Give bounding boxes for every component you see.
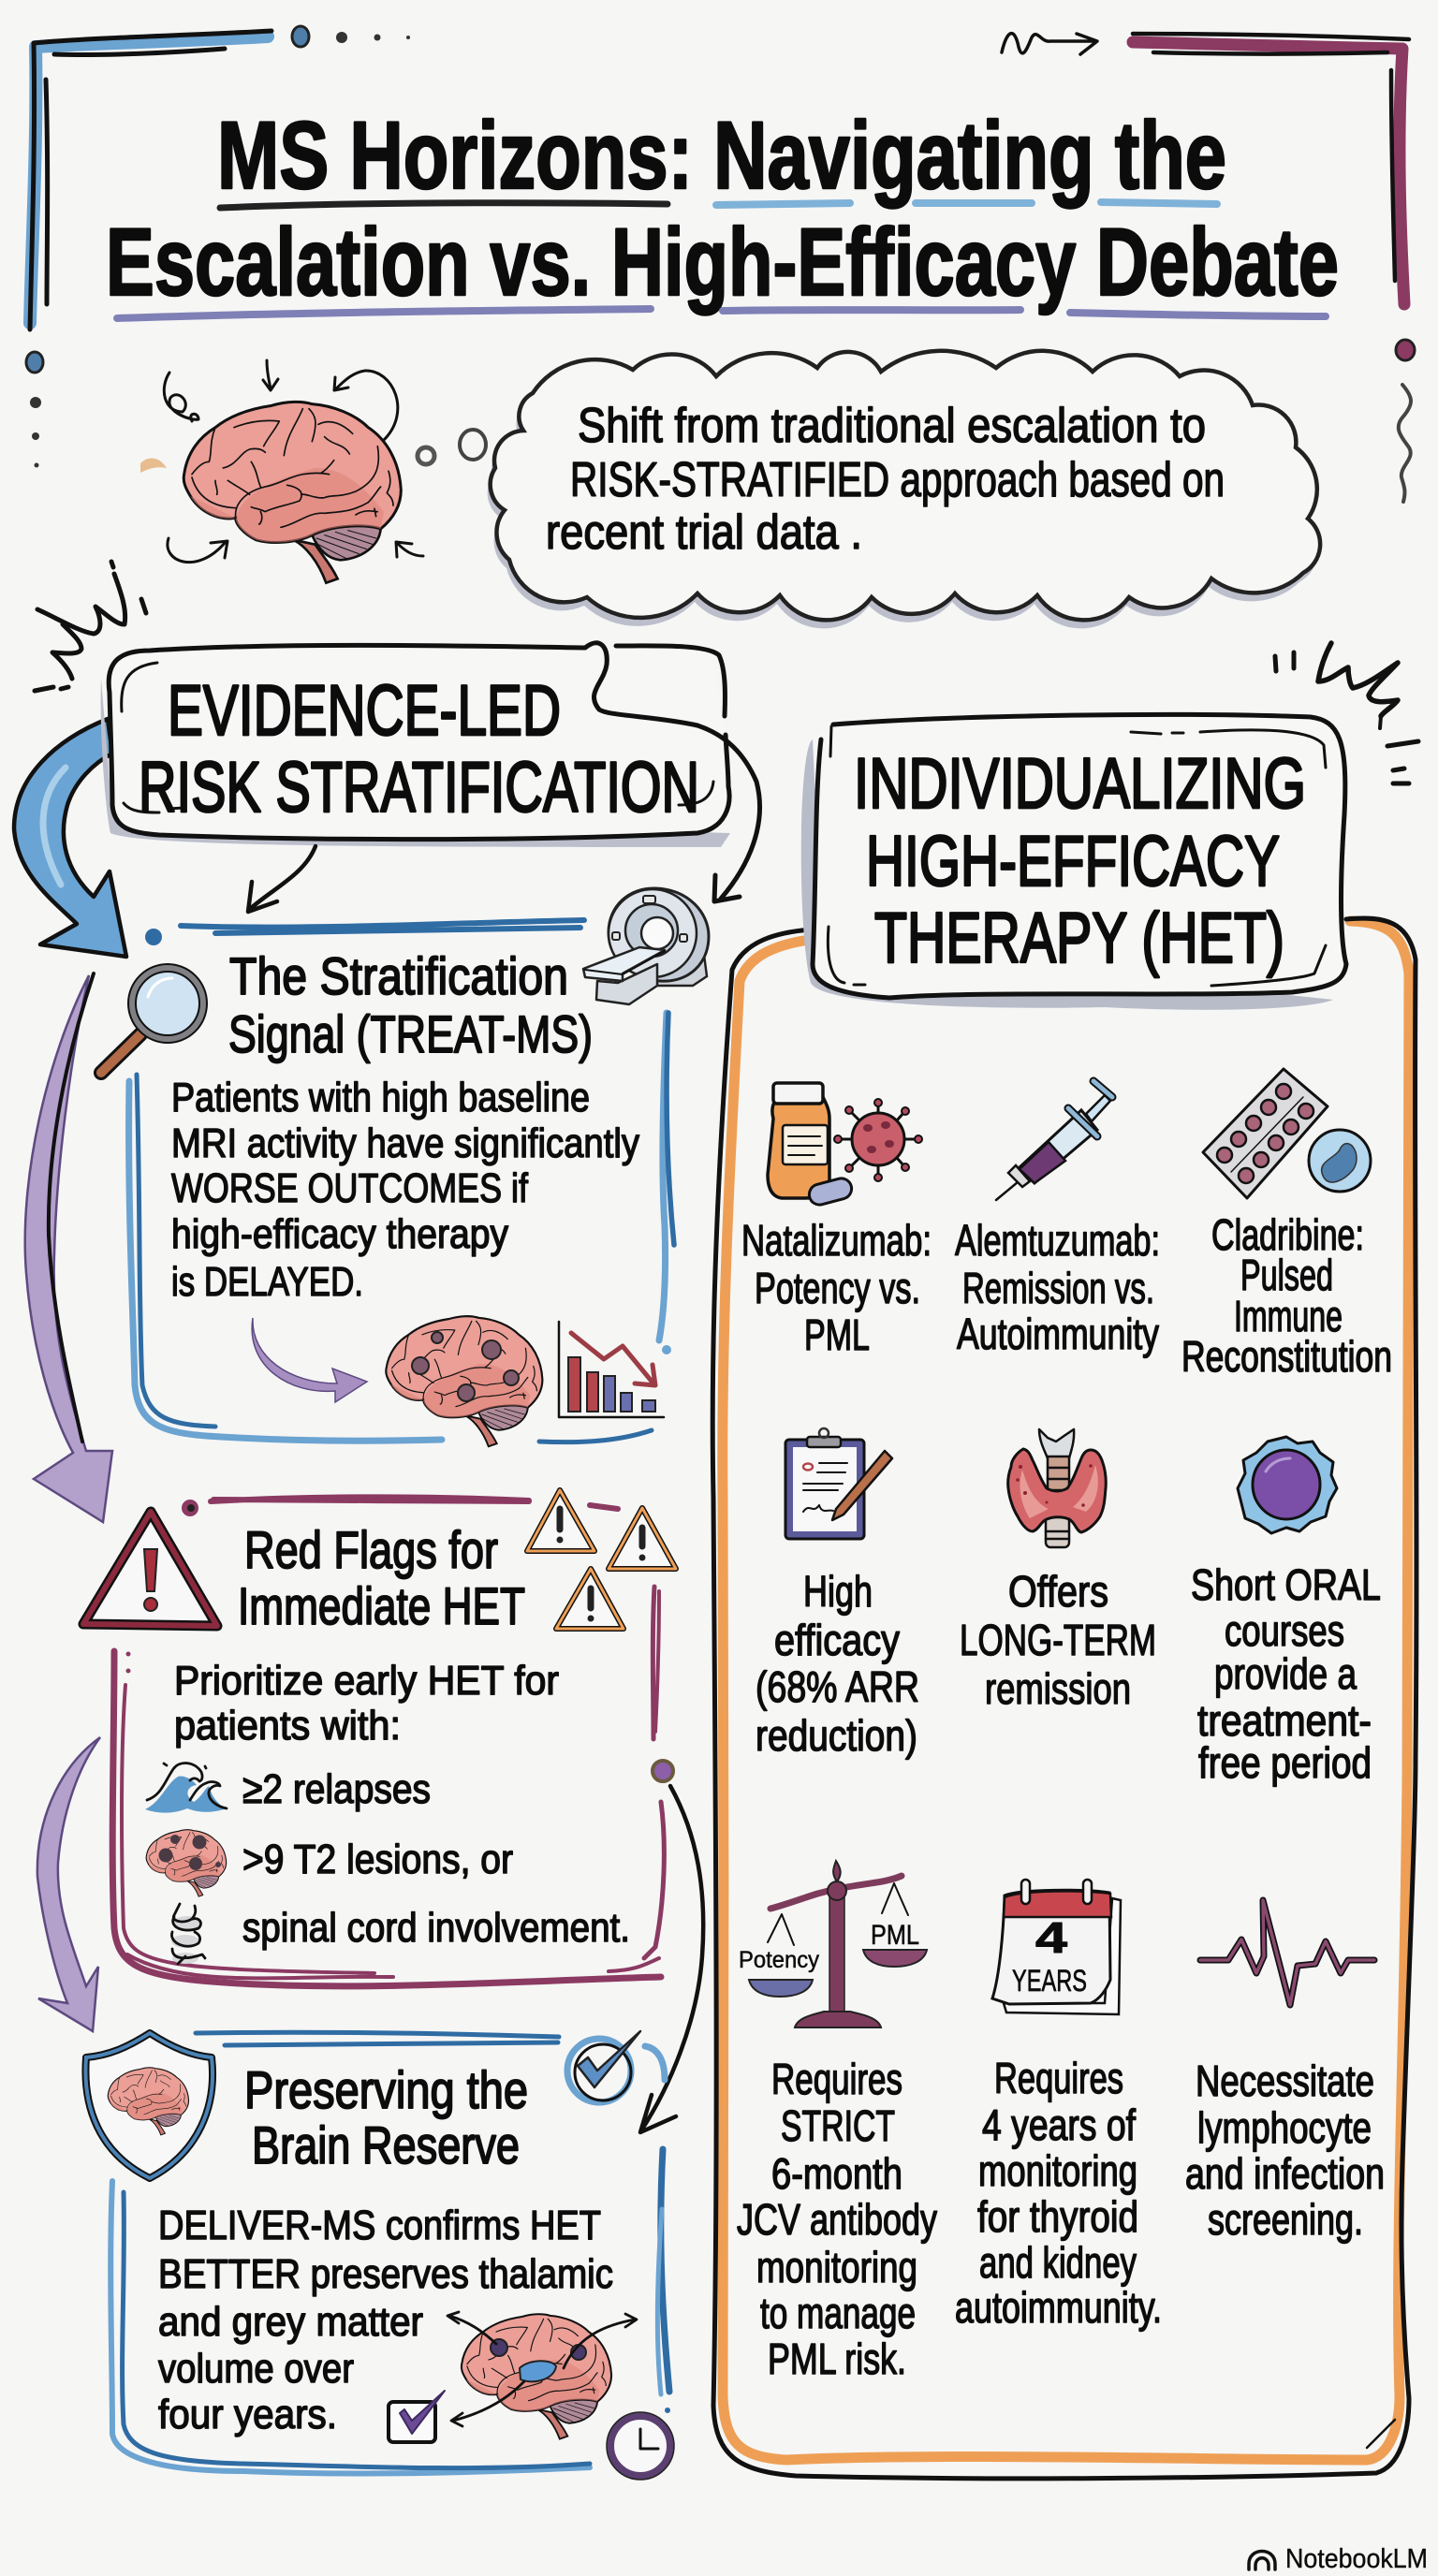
label [756, 1567, 919, 1760]
panel title: Preserving the [244, 2060, 528, 2119]
icon: calendar [992, 1880, 1121, 2014]
scribble left [35, 562, 146, 691]
label [955, 1216, 1160, 1358]
panel: individualizing HET frame [712, 918, 1416, 2479]
icon: syringe [996, 1081, 1112, 1200]
panel title [228, 946, 593, 1063]
column: natalizumab efficacy [756, 1428, 919, 1760]
icon: balance scale: PML [871, 1920, 919, 1951]
label: Natalizumab: [741, 1216, 932, 1265]
label: treatment- [1197, 1696, 1372, 1745]
panel body text: four years. [158, 2392, 337, 2437]
icon: orange warning triangles [527, 1490, 676, 1629]
panel title [244, 2060, 528, 2174]
panel body text: WORSE OUTCOMES if [171, 1165, 529, 1211]
column: cladribine monitoring [1185, 1900, 1385, 2244]
doodle arrows around brain [140, 360, 486, 563]
panel body text: MRI activity have significantly [171, 1120, 639, 1166]
panel body text: BETTER preserves thalamic [158, 2251, 613, 2297]
item: relapses [145, 1764, 431, 1813]
top frame: magenta corner [1133, 34, 1409, 304]
icon: main brain [140, 360, 486, 583]
column: alemtuzumab heading [955, 1081, 1160, 1358]
item: T2 lesions: >9 T2 lesions, or [242, 1837, 513, 1882]
title [106, 102, 1339, 315]
label [737, 2055, 937, 2383]
panel body text: is DELAYED. [171, 1259, 363, 1305]
right dot and squiggle [1396, 340, 1415, 502]
panel body text [174, 1658, 559, 1749]
label: free period [1198, 1738, 1372, 1787]
heading: evidence-led box [101, 643, 760, 901]
panel body text [171, 1075, 639, 1305]
label: provide a [1214, 1649, 1357, 1698]
callout: cloud: RISK-STRATIFIED approach based on [570, 453, 1225, 507]
label [1191, 1560, 1381, 1787]
panel body text: high-efficacy therapy [171, 1211, 508, 1257]
panel body text [158, 2203, 613, 2437]
callout: cloud: recent trial data . [546, 505, 862, 560]
label: Requires [771, 2055, 902, 2103]
panel body text: Prioritize early HET for [174, 1658, 559, 1704]
column: natalizumab heading [741, 1083, 932, 1359]
label: Offers [1008, 1567, 1108, 1616]
label: autoimmunity. [955, 2283, 1162, 2332]
column: alemtuzumab remission [960, 1429, 1156, 1713]
column: natalizumab monitoring [737, 1861, 937, 2383]
callout: cloud [488, 351, 1320, 628]
panel frame [112, 1497, 673, 1986]
heading: individualizing box: INDIVIDUALIZING [854, 744, 1306, 824]
column: cladribine heading [1181, 1069, 1392, 1381]
heading: evidence-led box: EVIDENCE-LED [168, 671, 561, 751]
panel title: Red Flags for [244, 1520, 498, 1579]
small arrow to stratification panel [248, 846, 315, 912]
label: for thyroid [977, 2192, 1138, 2241]
icon: brain with thalamus [448, 2312, 637, 2439]
icon: thyroid [1008, 1429, 1106, 1547]
label: Immune [1234, 1292, 1343, 1340]
column: alemtuzumab monitoring [955, 1880, 1162, 2332]
label: Potency vs. [755, 1264, 920, 1312]
icon: calendar: 4 [1035, 1913, 1068, 1962]
panel body text: volume over [158, 2346, 354, 2392]
callout: cloud: Shift from traditional escalation to [578, 399, 1206, 453]
icon: clipboard [785, 1428, 892, 1539]
big purple arrow 1 [25, 973, 112, 1522]
panel body text: DELIVER-MS confirms HET [158, 2203, 601, 2248]
arrow: red flags to brain reserve [640, 1786, 703, 2132]
panel: stratification signal [101, 888, 709, 1446]
panel title: The Stratification [229, 946, 568, 1005]
label: Requires [994, 2054, 1123, 2102]
title underlines [117, 202, 1326, 318]
label: 6-month [771, 2149, 902, 2198]
label [1181, 1210, 1392, 1381]
icon: pill bottle and virus [768, 1083, 922, 1208]
panel body text: Patients with high baseline [171, 1075, 590, 1120]
icon: check box [389, 2391, 445, 2442]
panel: brain reserve [85, 2031, 674, 2480]
icon: blister pack and cell [1203, 1069, 1371, 1198]
label: monitoring [756, 2243, 917, 2291]
item: T2 lesions [146, 1830, 513, 1896]
label: LONG-TERM [960, 1616, 1156, 1664]
label: PML [804, 1310, 870, 1359]
panel title [238, 1520, 525, 1635]
label: Remission vs. [962, 1264, 1154, 1312]
label: Autoimmunity [957, 1310, 1159, 1358]
label [955, 2054, 1162, 2332]
item: spinal cord: spinal cord involvement. [242, 1905, 630, 1951]
icon: MRI scanner [583, 888, 709, 1004]
heading: evidence-led box: RISK STRATIFICATION [139, 748, 699, 827]
label: to manage [760, 2289, 916, 2337]
label [1185, 2056, 1385, 2244]
label [741, 1216, 932, 1359]
icon: balance scale: Potency [739, 1947, 819, 1973]
label: reduction) [756, 1711, 917, 1760]
icon: lymphocyte [1238, 1437, 1337, 1533]
item: spinal cord [171, 1904, 630, 1964]
panel title: Signal (TREAT-MS) [228, 1004, 593, 1063]
item: relapses: ≥2 relapses [242, 1766, 431, 1812]
label: Necessitate [1196, 2056, 1374, 2105]
heading: individualizing box: HIGH-EFFICACY [866, 822, 1280, 901]
panel title: Brain Reserve [252, 2115, 520, 2174]
label: (68% ARR [756, 1662, 919, 1711]
panel frame [129, 920, 674, 1442]
label: High [803, 1567, 873, 1616]
footer: NotebookLM mark: NotebookLM [1285, 2544, 1428, 2574]
icon: shield with brain [85, 2033, 213, 2178]
label: lymphocyte [1197, 2103, 1372, 2152]
panel: red flags [83, 1490, 676, 1986]
icon: red warning triangle [83, 1512, 217, 1626]
label: screening. [1208, 2195, 1363, 2244]
chart: falling bars [559, 1322, 664, 1417]
panel body text: patients with: [174, 1703, 401, 1749]
thick blue arrow [14, 719, 126, 957]
heading: individualizing box: THERAPY (HET) [874, 899, 1284, 978]
icon: balance scale [739, 1861, 927, 2027]
arrows from brain [448, 2312, 637, 2426]
label: and kidney [979, 2238, 1137, 2287]
label: efficacy [774, 1616, 900, 1664]
label: monitoring [978, 2146, 1137, 2195]
decorative dots top [292, 26, 410, 47]
icon: calendar: YEARS [1012, 1964, 1087, 1998]
label: Short ORAL [1191, 1560, 1381, 1609]
icon: heartbeat line [1200, 1900, 1374, 2005]
label: remission [985, 1664, 1131, 1713]
panel title: Immediate HET [238, 1576, 525, 1635]
panel body text: and grey matter [158, 2299, 423, 2345]
label: Pulsed [1240, 1251, 1333, 1299]
heading: individualizing box [801, 714, 1346, 1010]
panel frame [110, 2032, 670, 2474]
icon: check circle [567, 2031, 640, 2102]
label: Cladribine: [1211, 1210, 1364, 1259]
label: STRICT [781, 2101, 895, 2150]
column: cladribine courses [1191, 1437, 1381, 1787]
label: Alemtuzumab: [955, 1216, 1160, 1265]
label [960, 1567, 1156, 1713]
label: and infection [1185, 2149, 1385, 2198]
icon: brain with lesions [386, 1316, 542, 1446]
arrow: to lesion brain [252, 1318, 367, 1402]
label: PML risk. [768, 2334, 906, 2383]
label: courses [1225, 1606, 1344, 1655]
label: JCV antibody [737, 2195, 937, 2244]
squiggle arrow top right [1002, 34, 1097, 54]
top frame: blue corner [30, 31, 271, 329]
left dots [26, 352, 43, 468]
big purple arrow 2 [37, 1737, 100, 2031]
label: 4 years of [982, 2100, 1136, 2149]
icon: magnifying glass [101, 968, 203, 1073]
scribble right [1275, 643, 1418, 783]
icon: clock [607, 2412, 674, 2480]
